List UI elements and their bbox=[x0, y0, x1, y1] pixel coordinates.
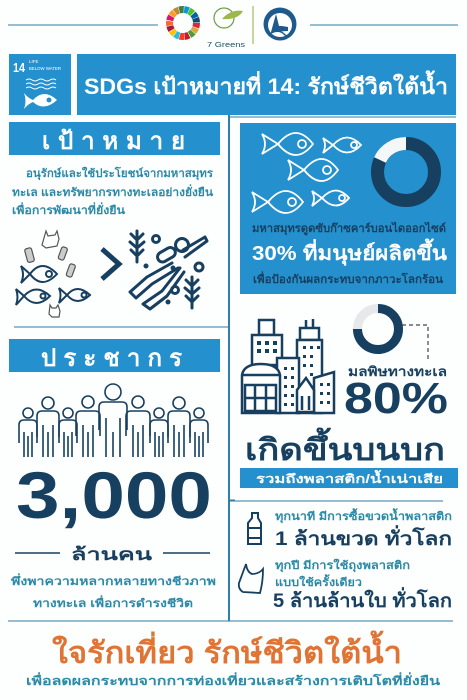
label: million people: ล้านคน bbox=[71, 545, 153, 564]
subtitle: เพื่อลดผลกระทบจากการท่องเที่ยวและสร้างการเติบโตที่ยั่งยืน bbox=[26, 672, 441, 688]
bag text bbox=[273, 558, 452, 612]
carbon text: 30% ที่มนุษย์ผลิตขึ้น bbox=[252, 238, 447, 266]
bag text: ทุกปี มีการใช้ถุงพลาสติก bbox=[275, 558, 410, 573]
goal text: เพื่อการพัฒนาที่ยั่งยืน bbox=[12, 202, 126, 217]
pollution text: 80% bbox=[344, 374, 448, 423]
bag text: แบบใช้ครั้งเดียว bbox=[275, 574, 362, 589]
banner: plastics and waste water bbox=[240, 468, 458, 488]
logo: 7 Greens bbox=[207, 8, 245, 49]
title banner: SDGs เป้าหมายที่ 14: รักษ์ชีวิตใต้น้ำ bbox=[84, 70, 448, 99]
goal text: ทะเล และทรัพยากรทางทะเลอย่างยั่งยืน bbox=[12, 184, 214, 199]
donut chart: 85 percent bbox=[378, 143, 434, 200]
carbon text: มหาสมุทรดูดซับก๊าซคาร์บอนไดออกไซด์ bbox=[252, 221, 446, 236]
carbon text: เพื่อป้องกันผลกระทบจากภาวะโลกร้อน bbox=[253, 271, 443, 286]
pollution text: เกิดขึ้นบนบก bbox=[245, 427, 445, 467]
title banner bbox=[77, 54, 456, 115]
heading: goal: เป้าหมาย bbox=[42, 128, 185, 155]
icon: bottle bbox=[248, 513, 261, 544]
bottle text bbox=[275, 508, 452, 550]
pollution text bbox=[245, 364, 448, 467]
population text: ทางทะเล เพื่อการดำรงชีวิต bbox=[33, 595, 193, 610]
population text bbox=[11, 573, 216, 610]
panel: carbon bbox=[240, 123, 456, 294]
goal text: อนุรักษ์และใช้ประโยชน์จากมหาสมุทร bbox=[26, 166, 213, 181]
panel: population bbox=[9, 339, 220, 610]
icon: fish among plastic bbox=[16, 231, 90, 317]
icon: city bbox=[242, 319, 334, 413]
banner: plastics and waste water: รวมถึงพลาสติก/น้ำเน่าเสีย bbox=[256, 469, 443, 486]
carbon text bbox=[252, 221, 447, 286]
icon: diver and seaweed bbox=[130, 231, 207, 309]
population text: พึ่งพาความหลากหลายทางชีวภาพ bbox=[11, 573, 216, 588]
icon: SDG 14 life below water bbox=[9, 54, 71, 115]
number: 3,000: 3,000 bbox=[16, 458, 212, 532]
heading: population: ประชากร bbox=[41, 345, 182, 372]
slogan: ใจรักเที่ยว รักษ์ชีวิตใต้น้ำ bbox=[52, 630, 402, 670]
logo: SDG wheel bbox=[164, 4, 202, 42]
pollution text: มลพิษทางทะเล bbox=[348, 364, 447, 379]
heading: goal bbox=[9, 122, 220, 155]
icon: SDG 14 life below water: BELOW WATER bbox=[29, 66, 62, 71]
icon: SDG 14 life below water: 14 bbox=[13, 60, 26, 75]
arrow: greater than bbox=[102, 249, 119, 279]
icon: plastic bag bbox=[239, 564, 263, 593]
icon: crowd bbox=[19, 384, 208, 457]
goal text bbox=[12, 166, 214, 217]
icon: SDG 14 life below water: LIFE bbox=[29, 59, 39, 64]
logo: seal bbox=[264, 8, 296, 40]
bottle text: 1 ล้านขวด ทั่วโลก bbox=[275, 525, 452, 550]
bottle text: ทุกนาที มีการซื้อขวดน้ำพลาสติก bbox=[275, 508, 452, 524]
donut chart: 80 percent bbox=[358, 308, 398, 350]
panel: goal bbox=[9, 122, 220, 317]
bag text: 5 ล้านล้านใบ ทั่วโลก bbox=[273, 587, 452, 612]
heading: population bbox=[9, 339, 220, 372]
icon: fish school bbox=[252, 133, 361, 213]
panel: plastic stats bbox=[239, 508, 452, 612]
logo: 7 Greens: 7 Greens bbox=[207, 40, 245, 49]
panel: marine pollution bbox=[240, 308, 458, 488]
